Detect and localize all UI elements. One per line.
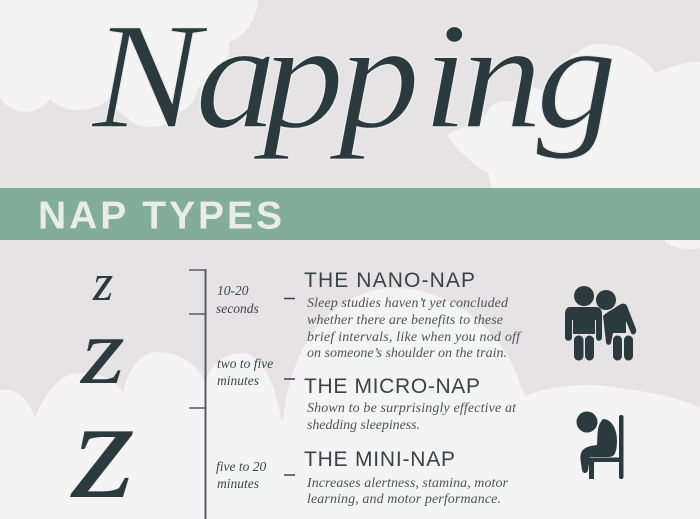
duration: two to five minutes: minutes xyxy=(217,373,259,388)
small cloud under band xyxy=(664,227,700,249)
nano-nap text: whether there are benefits to these xyxy=(307,313,503,328)
micro-nap text xyxy=(304,375,517,433)
nano-nap text: brief intervals, like when you nod off xyxy=(307,330,522,345)
duration: 10-20 seconds: 10-20 xyxy=(217,283,249,298)
duration: five to 20 minutes xyxy=(216,459,266,491)
heading band: nap types: NAP TYPES xyxy=(38,194,282,238)
duration: two to five minutes xyxy=(217,356,273,388)
dash connectors xyxy=(284,298,295,475)
mini-nap text: Increases alertness, stamina, motor xyxy=(306,476,509,491)
clouds top right xyxy=(447,44,700,190)
duration: five to 20 minutes: minutes xyxy=(217,476,259,491)
duration: 10-20 seconds: seconds xyxy=(216,301,259,316)
mini-nap text: THE MINI-NAP xyxy=(304,448,455,471)
nano-nap text: Sleep studies haven’t yet concluded xyxy=(307,296,509,311)
heading band: nap types xyxy=(0,188,700,240)
micro-nap text: THE MICRO-NAP xyxy=(304,375,480,398)
icon: person sleeping on chair xyxy=(576,412,624,479)
mini-nap text: learning, and motor performance. xyxy=(307,492,501,507)
micro-nap text: shedding sleepiness. xyxy=(307,418,420,433)
timeline xyxy=(189,269,206,519)
nano-nap text xyxy=(304,269,522,361)
duration: five to 20 minutes: five to 20 xyxy=(216,459,266,474)
small z: z xyxy=(92,255,113,312)
medium z: z xyxy=(79,298,125,404)
clouds top left xyxy=(0,0,258,127)
icon: two people leaning xyxy=(565,286,636,360)
duration: 10-20 seconds xyxy=(216,283,259,316)
duration: two to five minutes: two to five xyxy=(217,356,273,371)
micro-nap text: Shown to be surprisingly effective at xyxy=(307,401,517,416)
mini-nap text xyxy=(304,448,509,507)
clouds lower xyxy=(0,288,700,519)
nano-nap text: THE NANO-NAP xyxy=(304,269,475,292)
nano-nap text: on someone’s shoulder on the train. xyxy=(307,346,507,361)
